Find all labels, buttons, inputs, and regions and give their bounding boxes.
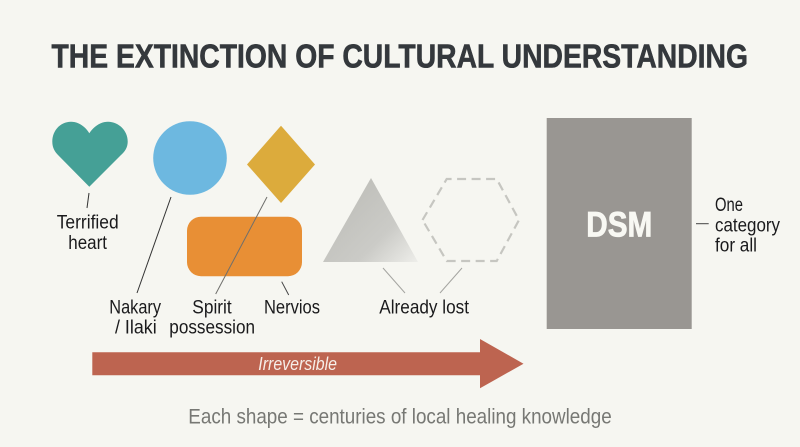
shape: terrified heart: [52, 122, 128, 254]
arrow label: Irreversible: [258, 353, 337, 374]
shape: nakary circle: [109, 121, 227, 338]
icon: nervios rounded rectangle: [187, 217, 302, 276]
leader line: circle: [137, 197, 171, 293]
panel: DSM block: [547, 118, 692, 329]
label: spirit possession: Spirit: [192, 297, 232, 318]
DSM label: DSM: [586, 206, 652, 245]
label: already lost: Already lost: [379, 297, 470, 318]
label: one category for all: One: [715, 195, 743, 216]
label: terrified heart: [57, 212, 119, 254]
leader line: nervios: [282, 282, 289, 295]
icon: heart: [52, 122, 128, 187]
icon: circle: [153, 121, 227, 195]
label: terrified heart: heart: [68, 233, 108, 254]
leader line: hexagon: [440, 268, 462, 293]
leader line: DSM: [696, 223, 709, 225]
label: nakary / ilaki: / Ilaki: [115, 317, 157, 338]
icon: fading triangle: [323, 178, 418, 262]
label: nakary / ilaki: [109, 297, 161, 338]
label: one category for all: for all: [715, 236, 757, 257]
label: one category for all: [715, 195, 780, 257]
label: spirit possession: [169, 297, 255, 338]
footer caption: Each shape = centuries of local healing knowledge: [188, 405, 612, 428]
icon: spirit possession diamond: [247, 126, 315, 203]
label: spirit possession: possession: [169, 317, 255, 338]
leader line: diamond: [216, 197, 267, 294]
label: one category for all: category: [715, 216, 780, 237]
label: nakary / ilaki: Nakary: [109, 297, 161, 318]
leader line: triangle: [383, 268, 405, 293]
label: nervios: Nervios: [264, 297, 320, 318]
icon: lost dashed hexagon: [422, 179, 519, 261]
label: terrified heart: Terrified: [57, 212, 119, 233]
arrow: irreversible: [92, 339, 524, 388]
leader line: heart: [87, 193, 89, 208]
